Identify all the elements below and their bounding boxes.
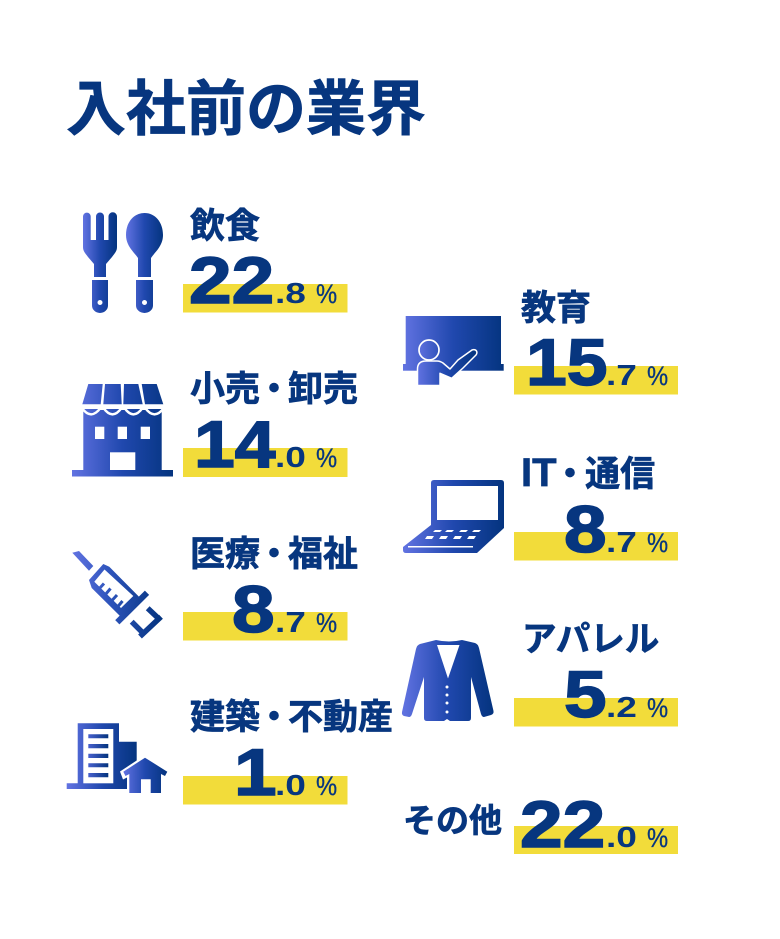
yellow bar	[514, 698, 678, 726]
panel: 飲食	[83, 207, 348, 318]
icon: teacher at blackboard	[403, 316, 504, 386]
value: 14.0%	[194, 407, 337, 481]
panel: IT・通信	[403, 451, 678, 567]
value: 8.7%: .7	[275, 607, 306, 639]
label: 飲食	[190, 207, 260, 246]
value: 5.2%: .2	[606, 692, 637, 724]
panel: 建築・不動産	[67, 698, 393, 810]
value: 15.7%: 15	[526, 325, 607, 399]
yellow bar	[514, 532, 678, 560]
value: 5.2%: %	[647, 694, 668, 723]
value: 8.7%	[232, 573, 337, 647]
value: 1.0%: .0	[275, 770, 306, 802]
panel: アパレル	[402, 621, 678, 732]
label: アパレル	[522, 621, 659, 659]
value: 8.7%: %	[316, 609, 337, 638]
value: 22.0%: .0	[606, 822, 637, 854]
yellow bar	[514, 366, 678, 394]
value: 22.8%: 22	[189, 244, 274, 318]
value: 15.7%: .7	[606, 360, 637, 392]
value: 22.8%: %	[316, 280, 337, 309]
panel: その他	[403, 788, 678, 862]
value: 22.0%	[520, 788, 668, 862]
icon: syringe	[72, 551, 161, 636]
value: 1.0%	[234, 736, 337, 810]
yellow bar	[183, 284, 348, 312]
title: 入社前の業界	[66, 76, 426, 143]
yellow bar	[183, 776, 348, 804]
label: 医療・福祉	[190, 535, 358, 574]
value: 14.0%: 14	[194, 407, 276, 481]
value: 15.7%: %	[647, 362, 668, 391]
value: 5.2%	[564, 658, 668, 732]
value: 22.8%	[189, 244, 337, 318]
label: IT・通信	[521, 451, 655, 495]
value: 8.7%: %	[647, 529, 668, 558]
icon: cardigan	[402, 640, 494, 721]
panel: 小売・卸売	[72, 370, 358, 481]
value: 8.7%	[564, 493, 668, 567]
value: 8.7%: .7	[606, 527, 637, 559]
yellow bar	[183, 612, 348, 640]
panel: 医療・福祉	[72, 535, 358, 647]
value: 14.0%: .0	[275, 442, 306, 474]
value: 22.0%: 22	[520, 788, 605, 862]
label: 教育	[521, 289, 591, 328]
value: 8.7%: 8	[232, 573, 275, 647]
icon: laptop	[403, 480, 504, 553]
value: 14.0%: %	[316, 444, 337, 473]
panel: 教育	[403, 289, 678, 399]
value: 1.0%: %	[316, 772, 337, 801]
yellow bar	[514, 826, 678, 854]
value: 8.7%: 8	[564, 493, 607, 567]
value: 1.0%: 1	[234, 736, 277, 810]
yellow bar	[183, 448, 348, 477]
icon: buildings and house	[67, 723, 170, 795]
value: 5.2%: 5	[564, 658, 607, 732]
value: 22.0%: %	[647, 824, 668, 853]
label: 小売・卸売	[190, 370, 358, 409]
value: 15.7%	[526, 325, 668, 399]
label: その他	[403, 802, 502, 839]
icon: store	[72, 384, 173, 476]
label: 建築・不動産	[190, 698, 393, 737]
value: 22.8%: .8	[275, 278, 306, 310]
icon: fork and spoon	[83, 212, 163, 313]
